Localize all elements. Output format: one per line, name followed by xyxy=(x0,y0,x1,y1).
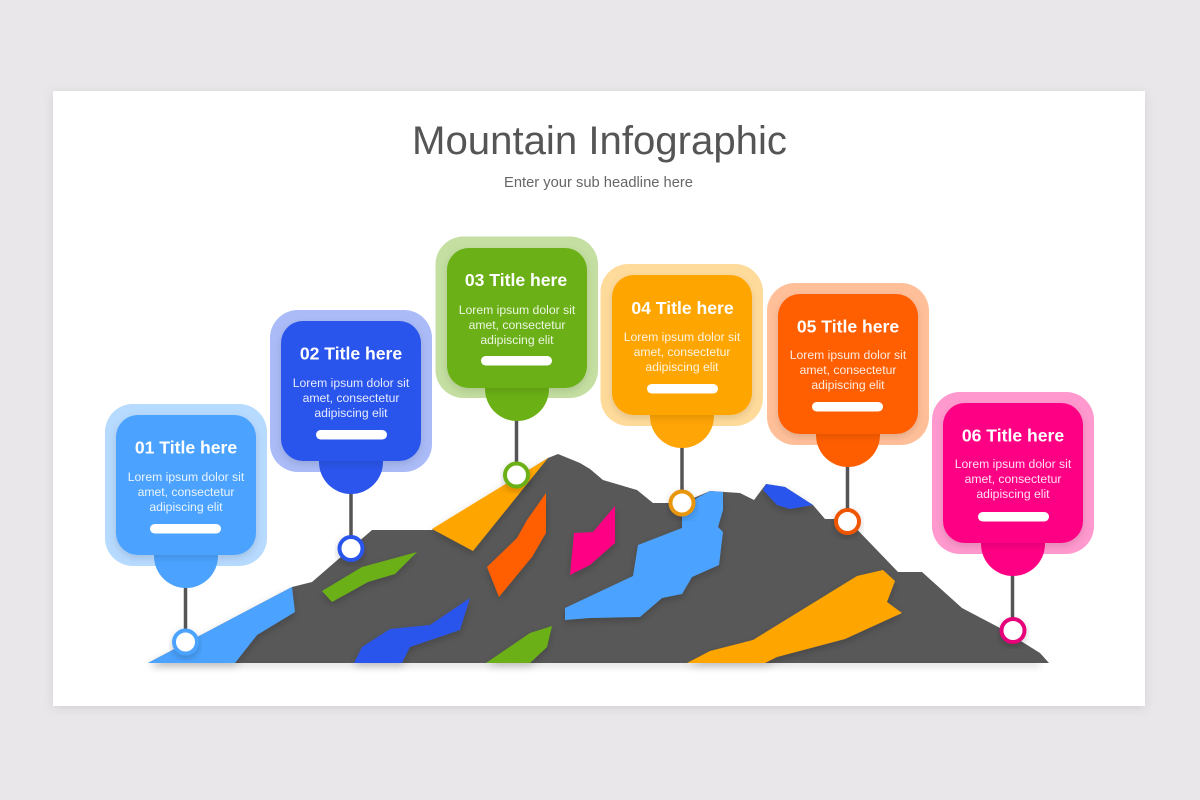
card halo xyxy=(600,264,763,426)
card halo xyxy=(436,236,598,398)
card title: 06 Title here xyxy=(962,426,1064,446)
subtitle: Enter your sub headline here xyxy=(504,175,693,191)
card text: adipiscing elit xyxy=(149,500,223,514)
title: Mountain Infographic xyxy=(412,119,787,163)
card body xyxy=(943,403,1083,543)
patch: light blue large xyxy=(565,491,723,620)
card text: Lorem ipsum dolor sit xyxy=(624,330,741,344)
patch: light blue left xyxy=(148,587,295,663)
card 04 xyxy=(600,264,763,514)
white pill xyxy=(481,356,552,366)
card title: 04 Title here xyxy=(631,298,734,318)
card text: Lorem ipsum dolor sit xyxy=(293,376,410,390)
patch: orange summit xyxy=(432,458,548,551)
white pill xyxy=(978,512,1049,522)
pin semicircle xyxy=(154,545,218,588)
patch: blue small xyxy=(763,484,813,509)
card halo xyxy=(767,283,929,445)
connector line xyxy=(349,491,353,541)
card text: adipiscing elit xyxy=(480,333,554,347)
mountain illustration xyxy=(148,454,1049,666)
card text: Lorem ipsum dolor sit xyxy=(955,457,1072,471)
location marker xyxy=(670,492,694,514)
connector line xyxy=(1011,573,1014,623)
card body xyxy=(612,275,752,415)
location marker xyxy=(1002,619,1024,642)
connector line xyxy=(184,585,187,635)
location marker xyxy=(836,510,859,533)
connector line xyxy=(680,445,684,495)
card text: Lorem ipsum dolor sit xyxy=(128,470,245,484)
card body xyxy=(116,415,256,555)
pin semicircle xyxy=(485,378,549,421)
card body xyxy=(447,248,587,388)
patch: green upper xyxy=(322,552,417,602)
white pill xyxy=(812,402,883,412)
card text: amet, consectetur xyxy=(303,391,399,405)
patch: blue lower xyxy=(354,598,470,663)
card 01 xyxy=(105,404,267,654)
pin semicircle xyxy=(981,533,1045,576)
card title: 03 Title here xyxy=(465,270,567,290)
patch: green lower xyxy=(486,626,552,663)
card text: Lorem ipsum dolor sit xyxy=(459,303,576,317)
card 05 xyxy=(767,283,929,533)
card title: 02 Title here xyxy=(300,344,402,364)
white pill xyxy=(150,524,221,534)
card 02 xyxy=(270,310,432,560)
card text: amet, consectetur xyxy=(138,485,234,499)
connector line xyxy=(846,464,849,514)
card text: adipiscing elit xyxy=(645,360,719,374)
patch: red-orange xyxy=(487,493,546,597)
card text: amet, consectetur xyxy=(469,318,565,332)
card halo xyxy=(105,404,267,566)
location marker xyxy=(174,630,197,654)
pin semicircle xyxy=(319,451,383,494)
card text: amet, consectetur xyxy=(800,363,896,377)
card text: adipiscing elit xyxy=(811,378,885,392)
pin semicircle xyxy=(650,405,714,448)
card 06 xyxy=(932,392,1094,642)
card title: 01 Title here xyxy=(135,438,237,458)
pin semicircle xyxy=(816,424,880,467)
card body xyxy=(281,321,421,461)
mountain ground shadow xyxy=(155,661,1040,666)
mountain body xyxy=(148,454,1049,663)
card text: amet, consectetur xyxy=(965,472,1061,486)
white pill xyxy=(316,430,387,440)
card title: 05 Title here xyxy=(797,316,899,336)
card text: adipiscing elit xyxy=(314,406,388,420)
card body xyxy=(778,294,918,434)
location marker xyxy=(505,464,528,486)
card halo xyxy=(270,310,432,472)
card text: Lorem ipsum dolor sit xyxy=(790,348,907,362)
card 03 xyxy=(436,236,598,486)
location marker xyxy=(340,537,362,560)
patch: pink xyxy=(570,506,615,575)
connector line xyxy=(515,418,518,468)
patch: orange large xyxy=(687,570,902,663)
card text: adipiscing elit xyxy=(976,487,1050,501)
white pill xyxy=(647,384,718,394)
card text: amet, consectetur xyxy=(634,345,730,359)
white slide panel xyxy=(53,91,1145,706)
card halo xyxy=(932,392,1094,554)
